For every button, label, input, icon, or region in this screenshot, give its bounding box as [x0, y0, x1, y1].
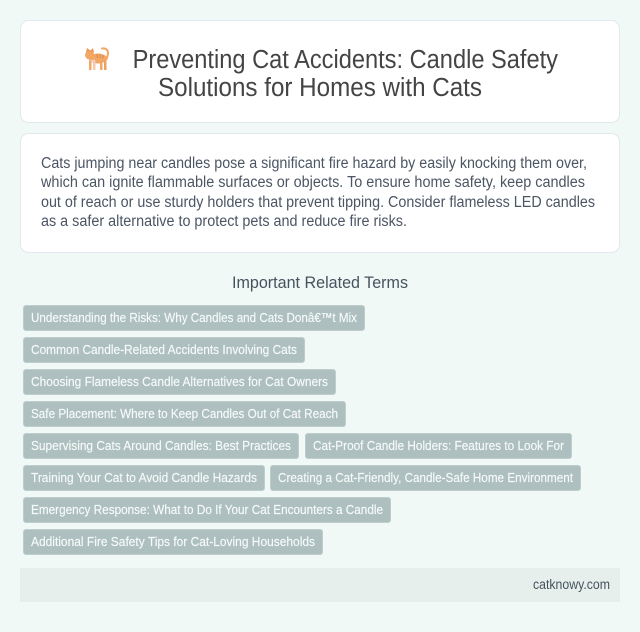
tag: cat-friendly home: Creating a Cat-Friendly, Candle-Safe Home Environment	[278, 470, 573, 485]
footer: catknowy.com	[533, 577, 610, 592]
tag: supervising cats: Supervising Cats Around Candles: Best Practices	[31, 438, 291, 453]
tag: cat-proof holders	[306, 434, 572, 458]
tag: common accidents	[24, 338, 304, 362]
tag: additional tips: Additional Fire Safety Tips for Cat-Loving Households	[31, 534, 315, 549]
tag: training your cat: Training Your Cat to Avoid Candle Hazards	[31, 470, 257, 485]
tag: emergency response: Emergency Response: What to Do If Your Cat Encounters a Candle	[31, 502, 383, 517]
tag: safe placement	[24, 402, 346, 426]
tag: understanding the risks: Understanding the Risks: Why Candles and Cats Donâ€™t Mix	[31, 310, 357, 325]
panel: intro text	[20, 134, 620, 252]
tag: flameless alternatives	[24, 370, 336, 394]
tag: emergency response	[24, 498, 390, 522]
footer	[20, 568, 620, 602]
panel: intro text: which can ignite flammable surfaces or objects. To ensure home safety, keep candles	[40, 174, 585, 191]
panel: intro text: Cats jumping near candles pose a significant fire hazard by easily knocking them over,	[41, 155, 587, 172]
panel: intro text: as a safer alternative to protect pets and reduce fire risks.	[41, 213, 407, 230]
title line 2: Solutions for Homes with Cats	[158, 74, 482, 102]
icon: cat	[85, 48, 108, 70]
tag: safe placement: Safe Placement: Where to Keep Candles Out of Cat Reach	[31, 406, 338, 421]
tag: flameless alternatives: Choosing Flameless Candle Alternatives for Cat Owners	[31, 374, 328, 389]
tag: cat-friendly home	[270, 466, 580, 490]
title line 1: Preventing Cat Accidents: Candle Safety	[133, 46, 558, 74]
tag: cat-proof holders: Cat-Proof Candle Holders: Features to Look For	[313, 438, 565, 453]
panel: intro text: out of reach or use sturdy holders that prevent tipping. Consider flameless LED candles	[41, 194, 595, 211]
heading: related terms: Important Related Terms	[232, 274, 408, 292]
tag: common accidents: Common Candle-Related Accidents Involving Cats	[31, 342, 297, 357]
panel: title card	[20, 20, 620, 122]
tag list	[24, 306, 580, 554]
tag: understanding the risks	[24, 306, 364, 330]
tag: supervising cats	[24, 434, 298, 458]
tag: training your cat	[24, 466, 264, 490]
tag: additional tips	[24, 530, 322, 554]
